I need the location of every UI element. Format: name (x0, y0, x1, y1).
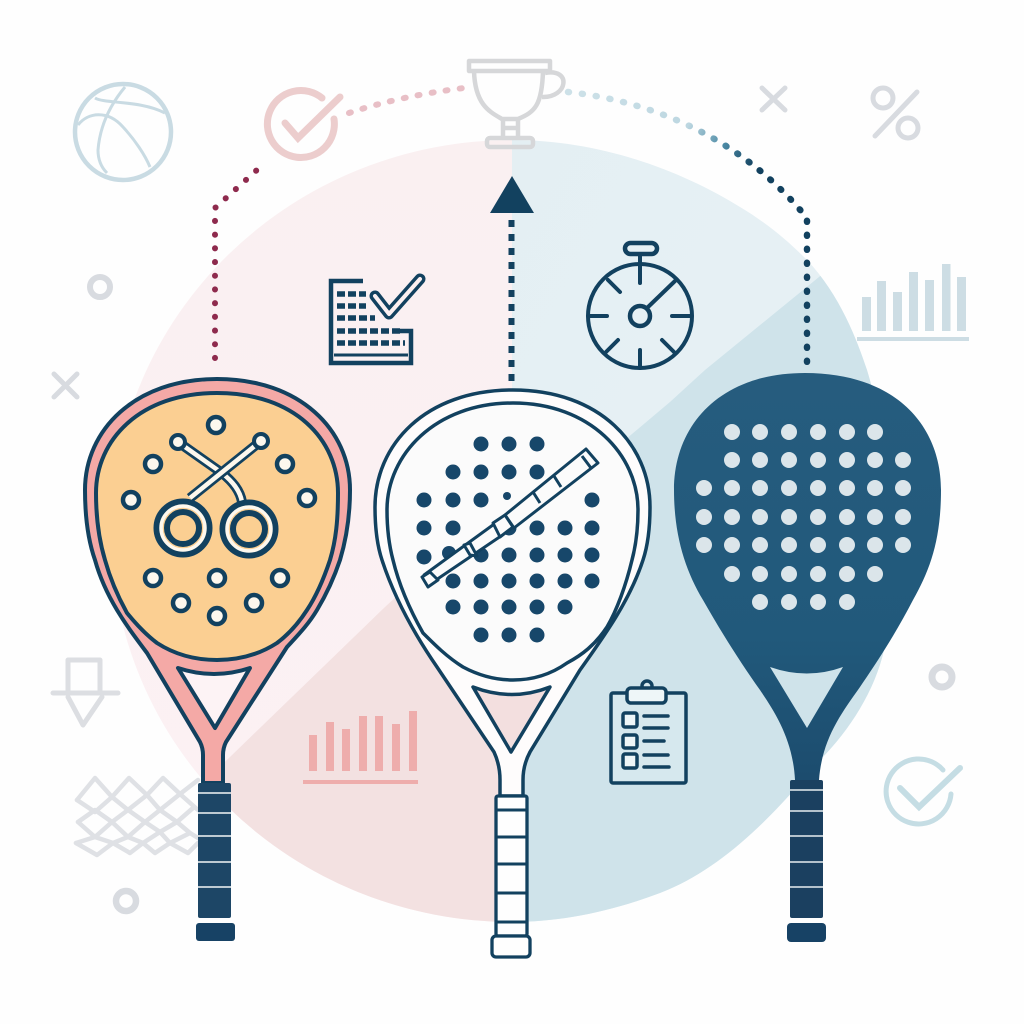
racket: right navy (674, 373, 941, 942)
icon: small ring right (932, 667, 952, 687)
racket: middle white (375, 390, 650, 957)
icon: calendar with check (331, 279, 420, 363)
icon: down arrow (53, 660, 118, 725)
face holes (123, 417, 315, 624)
racket face (96, 393, 338, 660)
handle cap (492, 936, 530, 957)
icon: check circle pink (267, 90, 340, 157)
icon: stopwatch (588, 243, 692, 368)
icon: small cross top (762, 88, 785, 110)
throat (178, 668, 250, 728)
racket body (674, 373, 941, 780)
handle (496, 796, 527, 936)
icon: small cross left (54, 374, 77, 397)
racket frame (85, 379, 350, 783)
throat (473, 687, 550, 752)
handle (790, 780, 823, 918)
handle (198, 783, 231, 918)
icon: check circle right (886, 759, 960, 824)
face holes (696, 424, 911, 610)
scissors icon (157, 434, 275, 555)
racket frame (375, 390, 650, 796)
face holes (416, 436, 600, 642)
chart: grey-blue bars right (857, 264, 969, 341)
background circle (122, 140, 884, 922)
racket face (387, 403, 638, 680)
chart: pink bars (303, 711, 418, 784)
calendar grid (337, 294, 405, 343)
handle cap (196, 923, 235, 941)
icon: small ring left (90, 277, 110, 297)
connector: central dashed arrow (490, 176, 534, 381)
connector: right dotted arc (568, 92, 807, 362)
racket: left orange (85, 379, 350, 941)
icon: trophy (469, 61, 563, 147)
pen icon (422, 449, 598, 587)
icon: small ring bottom (116, 891, 136, 911)
icon: percent (873, 88, 918, 138)
handle cap (787, 923, 826, 942)
connector: left dotted pink arc (349, 88, 464, 113)
icon: clipboard (611, 681, 686, 783)
connector: left dotted red (215, 169, 258, 358)
icon: net (76, 778, 198, 855)
icon: basketball (75, 84, 171, 180)
